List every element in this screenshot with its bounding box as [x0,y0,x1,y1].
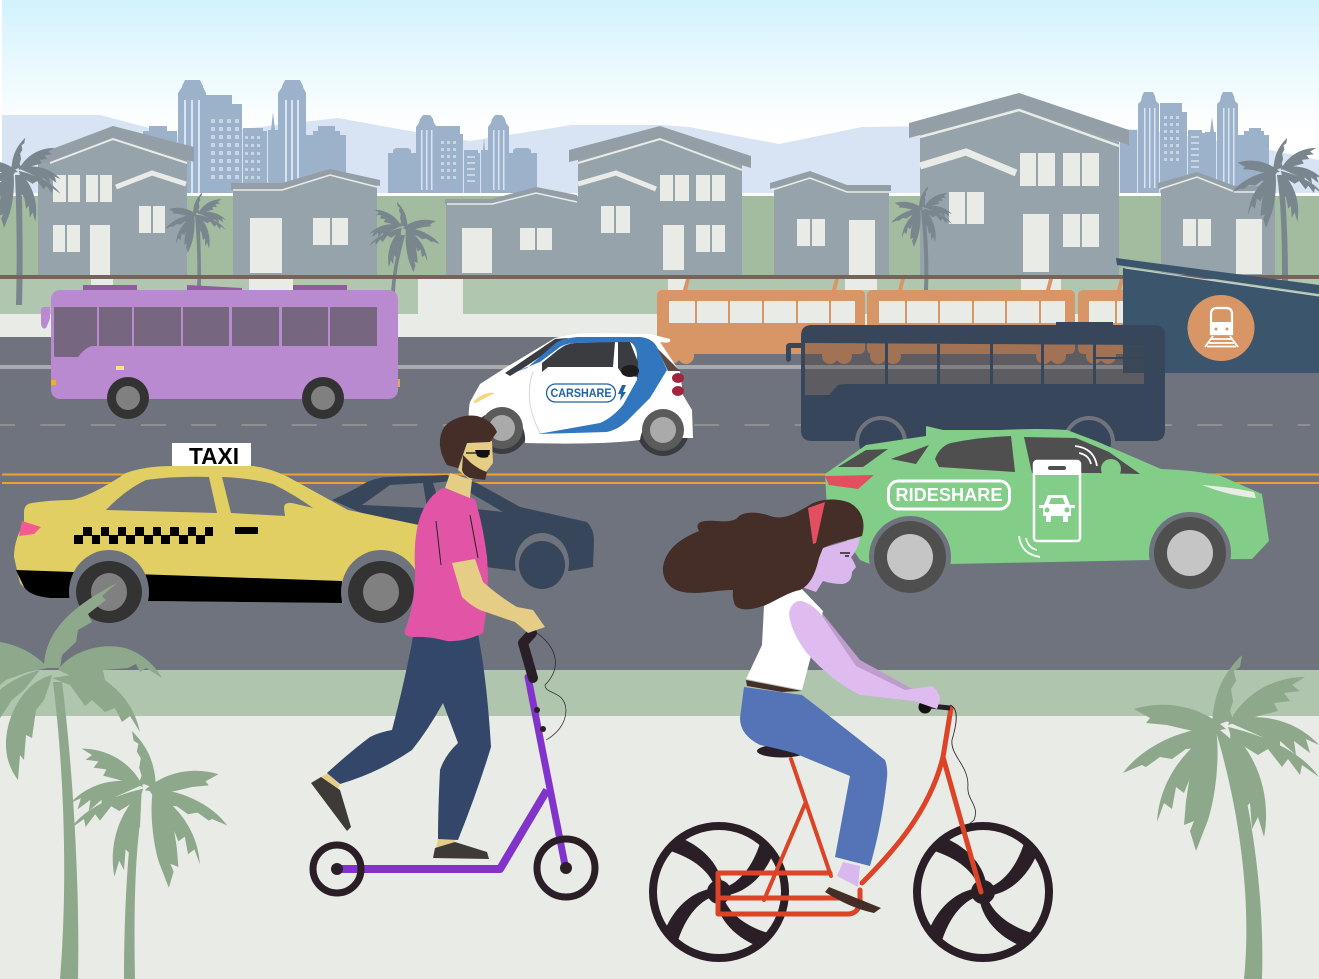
wheel [302,377,344,419]
dark bus [786,322,1165,466]
wheel [642,409,684,451]
palm: grey far right [1232,138,1319,282]
wheel [869,516,951,598]
house 7 [1158,172,1275,275]
front arm [789,601,940,709]
jeans [740,687,887,866]
arm [452,559,545,633]
palm: grey 4 [891,186,952,290]
train [657,279,1138,364]
wheel [107,377,149,419]
seat [757,744,807,758]
palm: foreground small [70,731,227,979]
carshare label [546,384,626,402]
house 3 [445,187,578,275]
carshare car [469,333,693,456]
icon: phone with car [1034,461,1080,541]
sidewalk verge [0,670,1319,979]
taxi checker stripe [74,527,213,544]
purple bus [41,285,400,419]
wheel [341,550,421,634]
taxi [14,443,421,634]
palm: grey 2 [165,192,226,290]
house 4 [569,126,751,275]
sky [2,0,1319,130]
bicycle frame [718,708,981,914]
palm: grey far left [0,138,61,305]
white top [746,587,823,690]
cable [950,705,976,825]
palm: foreground left [0,583,162,979]
house 6 [909,93,1129,275]
house 2 [231,169,380,275]
carshare label: CARSHARE [550,388,612,400]
palm: foreground right [1123,655,1319,979]
ridesharing car [825,426,1269,598]
taxi sign: TAXI [189,443,239,469]
house 5 [770,171,891,275]
taxi sign [172,443,251,469]
wheel [481,407,523,449]
train station [1116,258,1319,373]
neck [445,473,472,498]
house 1 [31,126,194,275]
face and neck [802,537,860,592]
wheel [69,550,149,634]
ground bands [0,193,1319,337]
headband [808,502,825,544]
shirt [405,488,488,641]
dark sedan [332,475,594,593]
legs and shoes [321,773,340,792]
palm: grey 3 [369,202,440,292]
rideshare label [888,481,1010,509]
foot and shoe [837,862,860,887]
icon: signal waves [1019,446,1097,557]
power line [0,275,1319,279]
mountains [2,115,1319,193]
wheel [1149,512,1231,594]
head [458,441,493,480]
hair [663,500,864,609]
man on scooter [311,416,595,897]
rear arm [818,608,939,705]
skyline: centre [388,115,537,196]
scooter [313,633,595,897]
bicycle wheels [653,826,1049,958]
road [0,337,1319,670]
woman on bicycle [653,500,1049,958]
skyline: left [143,80,346,196]
skyline: right [1120,92,1269,196]
icon: train in circle [1188,295,1254,361]
rideshare label: RIDESHARE [896,484,1002,505]
handlebar grip [918,700,950,714]
